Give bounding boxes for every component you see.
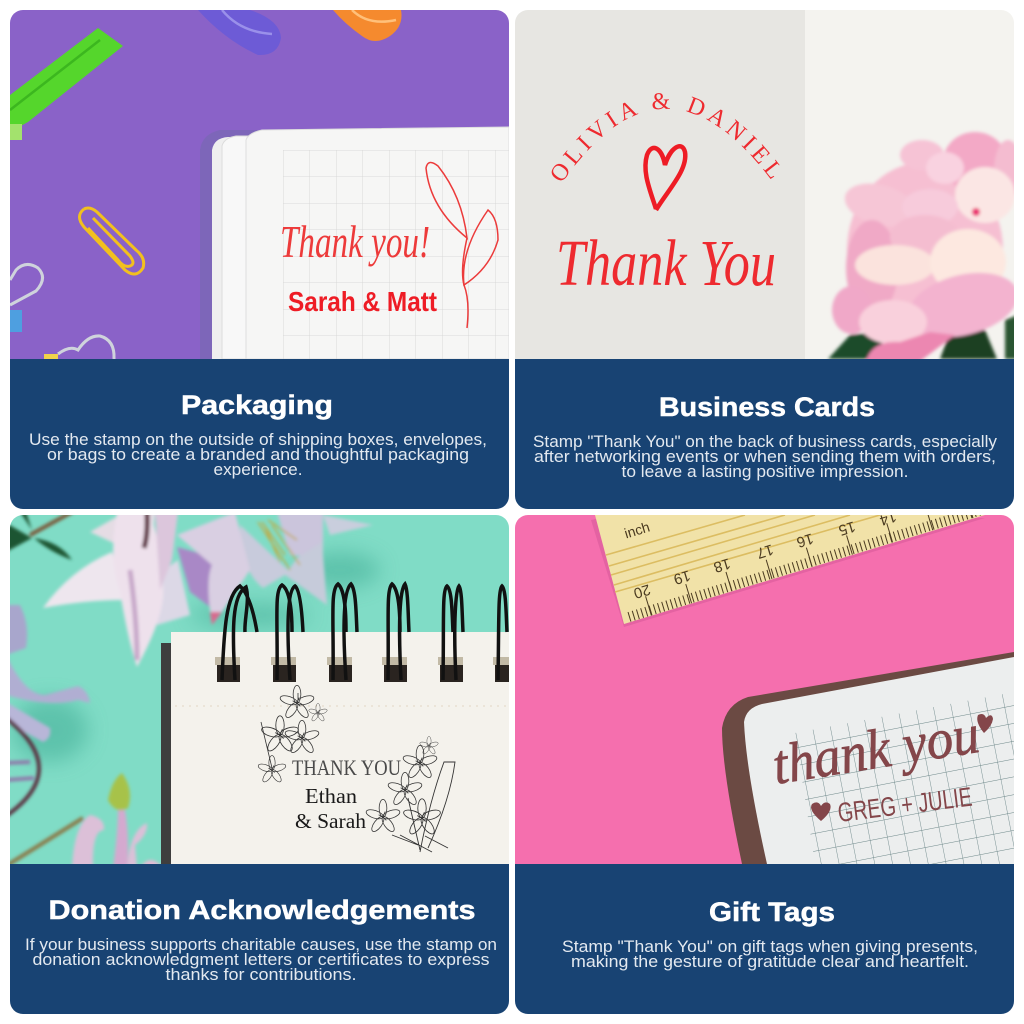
description: donation: donation acknowledgment letters or certificates to express bbox=[32, 951, 490, 969]
stamp: leaf bbox=[426, 162, 498, 328]
text panel: donation bbox=[10, 864, 509, 1014]
ruler labels: 19 bbox=[672, 566, 692, 588]
description: business cards: Stamp "Thank You" on the back of business cards, especially bbox=[533, 433, 998, 451]
description: gift tags: Stamp "Thank You" on gift tags when giving presents, bbox=[562, 938, 978, 956]
ruler labels: 15 bbox=[837, 517, 857, 539]
text panel: packaging bbox=[10, 359, 509, 509]
stamp: ethan: Ethan bbox=[305, 784, 358, 808]
photo: purple desk with notebook bbox=[10, 10, 509, 359]
stamp: thank you: THANK YOU bbox=[292, 755, 401, 780]
text panel: business cards bbox=[515, 359, 1014, 509]
panel: donation acknowledgements bbox=[6, 512, 509, 1014]
spiral binding bbox=[215, 584, 509, 682]
heading: donation acknowledgements: Donation Acknowledgements bbox=[48, 895, 476, 925]
ruler labels: 18 bbox=[712, 554, 732, 576]
ruler labels bbox=[622, 507, 898, 602]
panel: gift tags bbox=[515, 504, 1014, 1014]
photo: pink desk with ruler and tag bbox=[515, 504, 1014, 864]
ruler labels: 14 bbox=[878, 507, 898, 529]
description: packaging: experience. bbox=[214, 461, 302, 479]
flower shadows bbox=[12, 552, 380, 762]
tag backing bbox=[722, 652, 1014, 864]
description: gift tags bbox=[562, 938, 978, 971]
icon: peony bbox=[828, 132, 1024, 365]
heading: gift tags: Gift Tags bbox=[709, 897, 835, 927]
notebook bbox=[200, 127, 509, 359]
icon: purple clip bbox=[198, 10, 281, 55]
icon: wooden ruler bbox=[591, 504, 985, 627]
photo: teal desk with spiral notebook bbox=[6, 512, 509, 868]
panel: business cards bbox=[515, 10, 1014, 509]
ruler labels: 20 bbox=[632, 580, 652, 602]
description: business cards: to leave a lasting positive impression. bbox=[622, 463, 908, 481]
heading: packaging: Packaging bbox=[181, 390, 333, 420]
stamp: thank you: thank you bbox=[768, 703, 983, 797]
icon: green highlighter bbox=[10, 28, 123, 140]
description: business cards bbox=[533, 433, 998, 481]
notebook page bbox=[161, 632, 509, 864]
photo: open card with peony bbox=[515, 10, 1014, 359]
stamp: thank you: Thank you! bbox=[280, 216, 430, 267]
stamp: olivia and daniel arc: OLIVIA & DANIEL bbox=[552, 93, 780, 180]
stamp: names: Sarah & Matt bbox=[288, 286, 437, 317]
icon: binder clips bbox=[10, 264, 114, 359]
ruler labels: 17 bbox=[755, 540, 775, 562]
description: gift tags: making the gesture of gratitude clear and heartfelt. bbox=[571, 953, 969, 971]
icon: orange clip bbox=[333, 10, 402, 41]
icon: yellow paperclip bbox=[80, 208, 144, 274]
ruler labels: inch bbox=[622, 519, 652, 541]
text panel: gift tags bbox=[515, 864, 1014, 1014]
description: donation: If your business supports charitable causes, use the stamp on bbox=[25, 936, 497, 954]
icon: lily flowers bbox=[6, 512, 373, 868]
stamp: heart bbox=[645, 146, 685, 210]
description: donation: thanks for contributions. bbox=[166, 966, 356, 984]
stamp: and sarah: & Sarah bbox=[295, 809, 367, 833]
stamp: hearts bbox=[811, 714, 993, 821]
heading: business cards: Business Cards bbox=[659, 392, 875, 422]
stamp: thank you: Thank You bbox=[556, 227, 776, 300]
tag grid bbox=[795, 692, 1014, 864]
illustration: floral bottom bbox=[365, 736, 455, 852]
illustration: floral top bbox=[257, 685, 328, 784]
description: packaging: Use the stamp on the outside of shipping boxes, envelopes, bbox=[29, 431, 487, 449]
ruler labels: 16 bbox=[795, 529, 815, 551]
panel: packaging bbox=[10, 10, 509, 509]
tag card bbox=[744, 657, 1014, 864]
description: donation bbox=[26, 938, 496, 980]
description: packaging: or bags to create a branded and thoughtful packaging bbox=[47, 446, 469, 464]
description: packaging bbox=[29, 431, 487, 479]
description: business cards: after networking events or when sending them with orders, bbox=[534, 448, 996, 466]
stamp: names: GREG + JULIE bbox=[836, 782, 974, 828]
